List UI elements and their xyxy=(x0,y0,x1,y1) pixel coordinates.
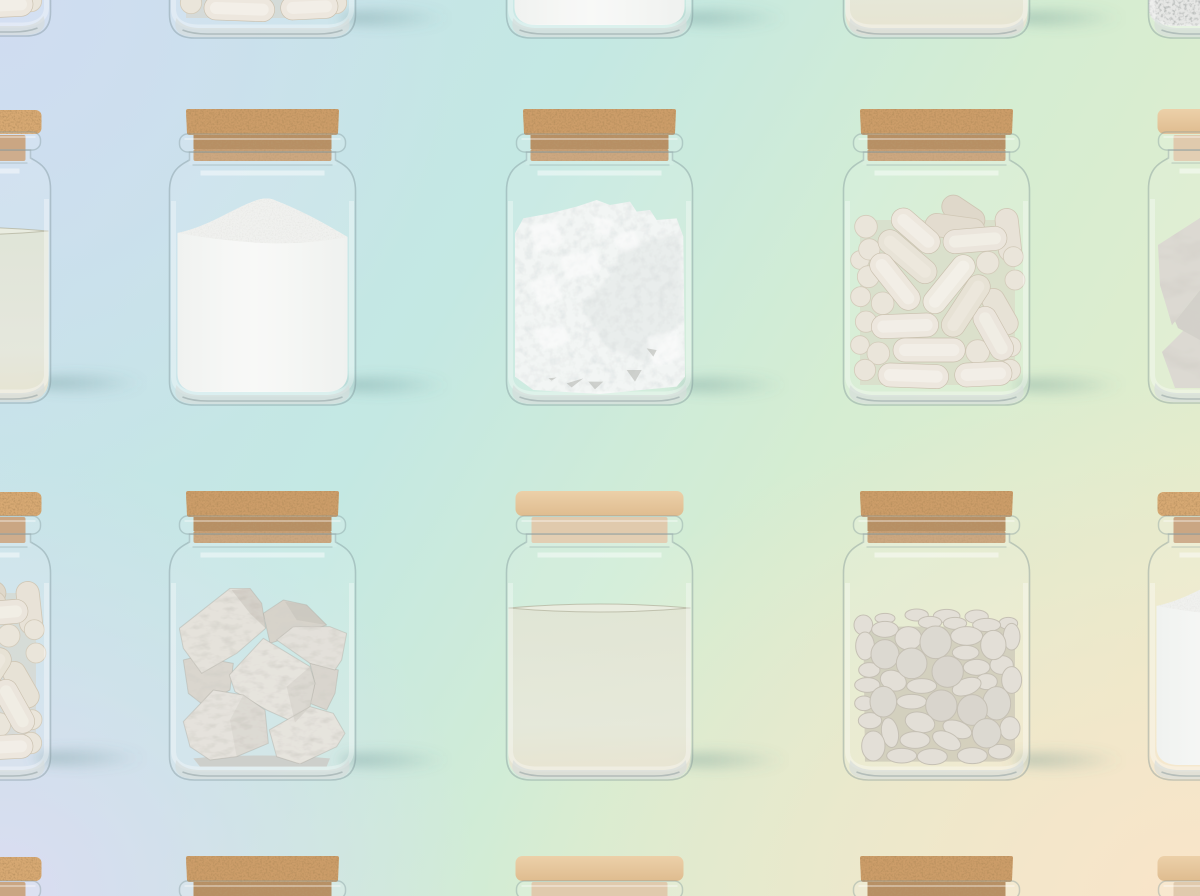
contents: powder xyxy=(514,0,684,25)
cork lid xyxy=(186,109,339,161)
contents: capsules xyxy=(177,0,351,18)
contents: liquid xyxy=(846,0,1028,35)
jar row 1, column 1: capsules xyxy=(170,0,451,38)
glass rim xyxy=(516,881,682,896)
jar row 1, left partial: capsules xyxy=(0,0,50,36)
cork lid xyxy=(860,856,1013,896)
jar row 4, column 1 lid xyxy=(180,856,346,896)
glass jar xyxy=(0,0,50,36)
glass rim xyxy=(180,881,346,896)
glass jar xyxy=(1148,516,1200,780)
wooden lid xyxy=(516,491,684,543)
wood lid xyxy=(0,857,42,896)
shadow xyxy=(338,10,450,26)
jar row 2, right partial: rocks xyxy=(1148,109,1200,403)
glass jar xyxy=(1148,0,1200,38)
jar row 1, right partial: speckled grit xyxy=(1148,0,1200,38)
jar row 3, column 1: rocks xyxy=(170,491,450,780)
wood lid xyxy=(0,492,42,543)
cork lid xyxy=(186,491,339,543)
shadow xyxy=(1012,10,1124,26)
contents: capsules xyxy=(851,207,1025,385)
shadow xyxy=(676,752,788,768)
contents: rocks xyxy=(179,588,347,767)
contents: powder xyxy=(1156,572,1200,765)
contents: powder xyxy=(178,198,348,392)
contents: rocks xyxy=(1158,218,1200,388)
wood lid xyxy=(0,110,42,161)
glass jar xyxy=(170,0,356,38)
glass jar xyxy=(1148,132,1200,403)
glass jar xyxy=(0,132,50,403)
contents: grit xyxy=(1148,0,1200,26)
contents: capsules xyxy=(0,580,46,758)
glass jar xyxy=(0,516,50,780)
glass rim xyxy=(0,881,40,896)
glass rim xyxy=(854,881,1020,896)
wooden lid xyxy=(1158,856,1200,896)
jar row 3, column 2: liquid xyxy=(506,491,788,780)
glass jar xyxy=(506,516,692,780)
glass jar xyxy=(506,0,692,38)
shadow xyxy=(1012,377,1124,393)
glass jar xyxy=(844,516,1030,780)
glass jar xyxy=(844,0,1030,38)
shadow xyxy=(676,377,788,393)
jar row 2, column 2: salt crystals xyxy=(506,109,788,405)
cork lid xyxy=(1158,492,1200,543)
jar row 4, right partial lid xyxy=(1158,856,1200,896)
shadow xyxy=(338,752,450,768)
jar row 1, column 2: powder xyxy=(506,0,788,38)
contents: tablets xyxy=(854,609,1022,765)
glass jar xyxy=(170,134,356,405)
contents: capsules xyxy=(0,0,46,16)
jar row 4, left partial lid xyxy=(0,857,42,896)
contents: liquid xyxy=(0,227,48,400)
jar row 3, left partial: capsules xyxy=(0,492,146,780)
glass rim xyxy=(1158,881,1200,896)
cork lid xyxy=(860,491,1013,543)
cork lid xyxy=(860,109,1013,161)
wooden lid xyxy=(516,856,684,896)
glass jar xyxy=(844,134,1030,405)
cork lid xyxy=(186,856,339,896)
shadow xyxy=(338,377,450,393)
shadow xyxy=(34,375,146,391)
jar row 2, left partial: liquid xyxy=(0,110,146,403)
shadow xyxy=(1012,752,1124,768)
wood lid xyxy=(1158,109,1200,161)
jar row 4, column 3 lid xyxy=(854,856,1020,896)
glass jar xyxy=(506,134,692,405)
glass jar xyxy=(170,516,356,780)
jar row 2, column 1: white powder xyxy=(170,109,450,405)
cork lid xyxy=(523,109,676,161)
jar row 3, right partial: powder xyxy=(1148,492,1200,780)
jar row 2, column 3: capsules xyxy=(844,109,1124,405)
contents: liquid xyxy=(508,604,690,777)
shadow xyxy=(676,10,788,26)
jar row 3, column 3: tablets xyxy=(844,491,1124,780)
contents: salt crystals xyxy=(515,200,685,394)
jar row 1, column 3: liquid xyxy=(844,0,1124,38)
shadow xyxy=(34,750,146,766)
jar row 4, column 2 lid xyxy=(516,856,684,896)
